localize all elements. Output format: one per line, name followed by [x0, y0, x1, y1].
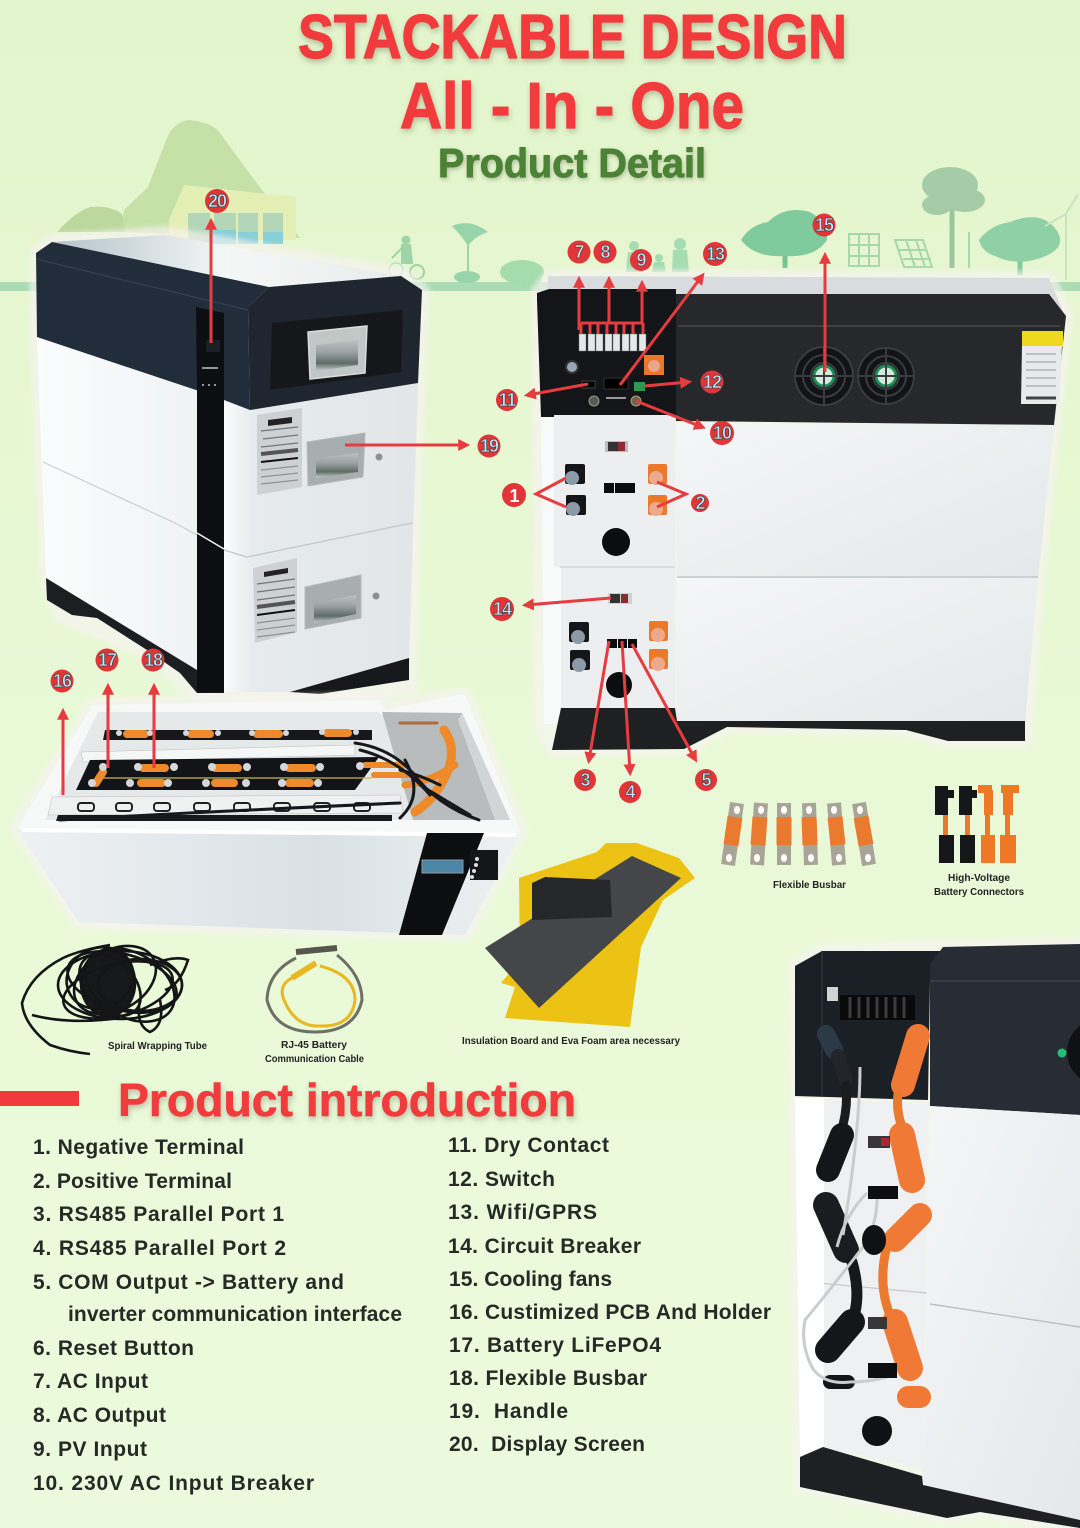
white left side [37, 337, 197, 670]
front face [17, 829, 520, 935]
parts list left column: 2. Positive Terminal [33, 1170, 233, 1193]
product label upper [257, 408, 302, 495]
arrow 12 [645, 382, 688, 386]
green indicator [1058, 1048, 1066, 1058]
badge 5 [695, 769, 717, 791]
product photo: open battery module [17, 695, 521, 935]
badge 15: 15 [815, 215, 834, 235]
badge 11: 11 [498, 390, 517, 410]
badge 7: 7 [574, 242, 584, 262]
arrow 13 [620, 276, 702, 385]
arrow 11 [528, 384, 588, 395]
badge 13 [703, 242, 727, 266]
cable loop [267, 948, 362, 1032]
parts list left column: 4. RS485 Parallel Port 2 [33, 1237, 287, 1260]
parts list left column: 6. Reset Button [33, 1337, 195, 1360]
busbar icons [726, 803, 871, 865]
handle: middle [307, 433, 365, 486]
badge 14 [490, 597, 514, 621]
accessory: flexible busbar [726, 803, 871, 891]
badge 20: 20 [208, 191, 227, 211]
outer frame [17, 695, 521, 834]
badge 13: 13 [706, 244, 725, 264]
parts list right column: 15. Cooling fans [449, 1268, 613, 1291]
parts list left column [33, 1136, 403, 1495]
white side strip [541, 417, 570, 724]
badge 17 [96, 648, 118, 672]
badge 17: 17 [98, 650, 117, 670]
white front doors [923, 1106, 1080, 1520]
base [46, 578, 197, 693]
tube caption: Spiral Wrapping Tube [108, 1041, 207, 1052]
arrow 18 [152, 687, 156, 768]
badge 2 [691, 493, 709, 513]
cable coil [22, 932, 188, 1054]
connector icons [935, 785, 1019, 863]
base [800, 1447, 1080, 1528]
knob lower [606, 672, 632, 698]
accessory: insulation board and eva foam [462, 843, 695, 1047]
parts list right column: 16. Custimized PCB And Holder [449, 1301, 772, 1324]
badge 16 [50, 670, 74, 692]
handle: lower [305, 575, 361, 629]
parts list left column: 1. Negative Terminal [33, 1136, 245, 1159]
knobs [602, 528, 630, 556]
wiring [60, 723, 479, 820]
arrow 7 [578, 280, 580, 330]
white front [224, 383, 418, 692]
display screen [206, 340, 220, 352]
badge 3: 3 [580, 770, 590, 790]
background scenery [0, 120, 1080, 291]
badge 14: 14 [493, 599, 512, 619]
arrow 5 [632, 644, 695, 759]
arrows 1 [536, 478, 566, 507]
vent mesh [270, 310, 403, 390]
cooling fan 1 [795, 347, 853, 405]
white doors [677, 423, 1054, 578]
parts list right column: 18. Flexible Busbar [449, 1367, 648, 1390]
parts list left column: 8. AC Output [33, 1404, 167, 1427]
terminals [88, 729, 364, 787]
arrow 19 [345, 444, 466, 446]
battery rows middle [76, 757, 379, 790]
grey communication cable [804, 1067, 887, 1382]
product label lower [253, 558, 297, 643]
red accent bar [0, 1091, 79, 1106]
control strip [399, 833, 484, 935]
badge 2: 2 [695, 493, 705, 513]
arrow 17 [106, 687, 110, 768]
parts list left column: 10. 230V AC Input Breaker [33, 1472, 315, 1495]
product photo: stacked battery perspective view [36, 233, 423, 697]
badge 7 [568, 240, 590, 264]
title [298, 3, 847, 186]
interior [45, 712, 413, 820]
badge 16: 16 [53, 671, 72, 691]
heading text: Product introduction [118, 1074, 576, 1126]
parts list right column: 13. Wifi/GPRS [448, 1201, 598, 1224]
arrow 20 [210, 222, 212, 343]
arrows 2 [657, 482, 686, 507]
product photo: rear connection panel [537, 276, 1066, 750]
black cable and plugs [826, 1034, 857, 1382]
white panel upper [554, 415, 675, 567]
orange connectors [883, 1036, 920, 1397]
arrows [63, 222, 825, 795]
parts list right column: 19. Handle [449, 1400, 569, 1423]
negative terminals [565, 464, 590, 672]
bottom row [56, 815, 392, 821]
parts list right column: 11. Dry Contact [448, 1134, 610, 1157]
arrow 10 [636, 401, 702, 427]
right compartment [382, 712, 510, 820]
base [552, 708, 1025, 750]
badge 20 [205, 189, 229, 213]
section heading: product introduction [0, 1074, 576, 1126]
heading: all in one: All - In - One [400, 69, 744, 142]
number badges [50, 189, 836, 803]
arrow 4 [622, 641, 630, 772]
parts list left column: 5. COM Output -> Battery and [33, 1271, 345, 1294]
control panel [537, 289, 676, 417]
heading: product detail: Product Detail [438, 140, 706, 186]
parts list left column: 7. AC Input [33, 1370, 149, 1393]
arrow 9 [640, 284, 644, 323]
badge 9 [630, 249, 652, 271]
connector caption: Battery Connectors [934, 887, 1024, 898]
handle: top [308, 326, 367, 379]
cable caption [265, 1040, 364, 1065]
badge 18: 18 [144, 650, 163, 670]
foam caption: Insulation Board and Eva Foam area necessary [462, 1036, 680, 1047]
warning label [1021, 331, 1063, 404]
foam sheets [485, 843, 695, 1027]
battery row top [103, 730, 372, 740]
cable caption: Communication Cable [265, 1054, 364, 1065]
badge 19: 19 [480, 436, 499, 456]
fan housing [676, 294, 1066, 425]
parts list left column: 9. PV Input [33, 1438, 148, 1461]
badge 15 [812, 214, 836, 236]
front dark panel [930, 944, 1080, 1115]
badge 12 [700, 370, 724, 394]
badge 1 [502, 483, 526, 507]
connector caption [934, 873, 1024, 898]
breakers [579, 334, 646, 351]
terminal strip [827, 987, 915, 1020]
dark housing [36, 242, 269, 410]
left dark compartment [795, 951, 945, 1100]
busbar caption: Flexible Busbar [773, 880, 846, 891]
top panel [52, 235, 401, 287]
rail bottom [48, 795, 403, 815]
product photo: connected battery stack [795, 944, 1080, 1528]
badge 10: 10 [713, 423, 732, 443]
badge 4 [619, 781, 641, 803]
parts list left column: inverter communication interface [68, 1303, 403, 1326]
fan edge [1067, 1019, 1080, 1085]
switches and ports [604, 441, 637, 648]
accessory: spiral wrapping tube [22, 932, 207, 1054]
rail top [81, 745, 355, 762]
positive terminals [648, 464, 668, 671]
accessory: RJ-45 battery communication cable [265, 948, 364, 1065]
white left panel [795, 1098, 928, 1468]
parts list right column: 17. Battery LiFePO4 [449, 1334, 662, 1357]
parts list left column: 3. RS485 Parallel Port 1 [33, 1203, 285, 1226]
badge 3 [574, 769, 596, 791]
white panel lower [561, 567, 675, 708]
parts list right column: 12. Switch [448, 1168, 556, 1191]
buttons panel [470, 850, 498, 880]
cable caption: RJ-45 Battery [281, 1040, 347, 1051]
arrow 15 [824, 256, 826, 372]
knobs [862, 1225, 892, 1446]
arrow 3 [589, 641, 609, 760]
badge 9: 9 [636, 250, 646, 270]
bracket 7 8 9 [581, 323, 643, 334]
badge 4: 4 [625, 782, 635, 802]
arrow 14 [526, 598, 611, 605]
heading: stackable design: STACKABLE DESIGN [298, 3, 847, 72]
parts list right column [448, 1134, 772, 1456]
cooling fan 2 [858, 348, 914, 404]
badge 18 [142, 648, 164, 672]
control panel terminals [566, 355, 664, 406]
parts list right column: 20. Display Screen [449, 1433, 646, 1456]
arrow 16 [62, 712, 64, 795]
badge 10 [710, 421, 734, 445]
badge 8: 8 [600, 242, 610, 262]
badge 8 [594, 240, 616, 264]
badge 19 [478, 434, 500, 458]
lcd screen [422, 860, 463, 873]
badge 1: 1 [509, 486, 519, 506]
arrow 8 [608, 280, 610, 323]
top plate [548, 276, 1065, 316]
badge 5: 5 [701, 770, 711, 790]
badge 12: 12 [703, 372, 722, 392]
switches and ports [868, 1136, 898, 1378]
parts list right column: 14. Circuit Breaker [448, 1235, 642, 1258]
accessory: high-voltage battery connectors [934, 785, 1024, 898]
display strip [196, 307, 224, 693]
connector caption: High-Voltage [948, 873, 1010, 884]
busbars [96, 733, 410, 783]
